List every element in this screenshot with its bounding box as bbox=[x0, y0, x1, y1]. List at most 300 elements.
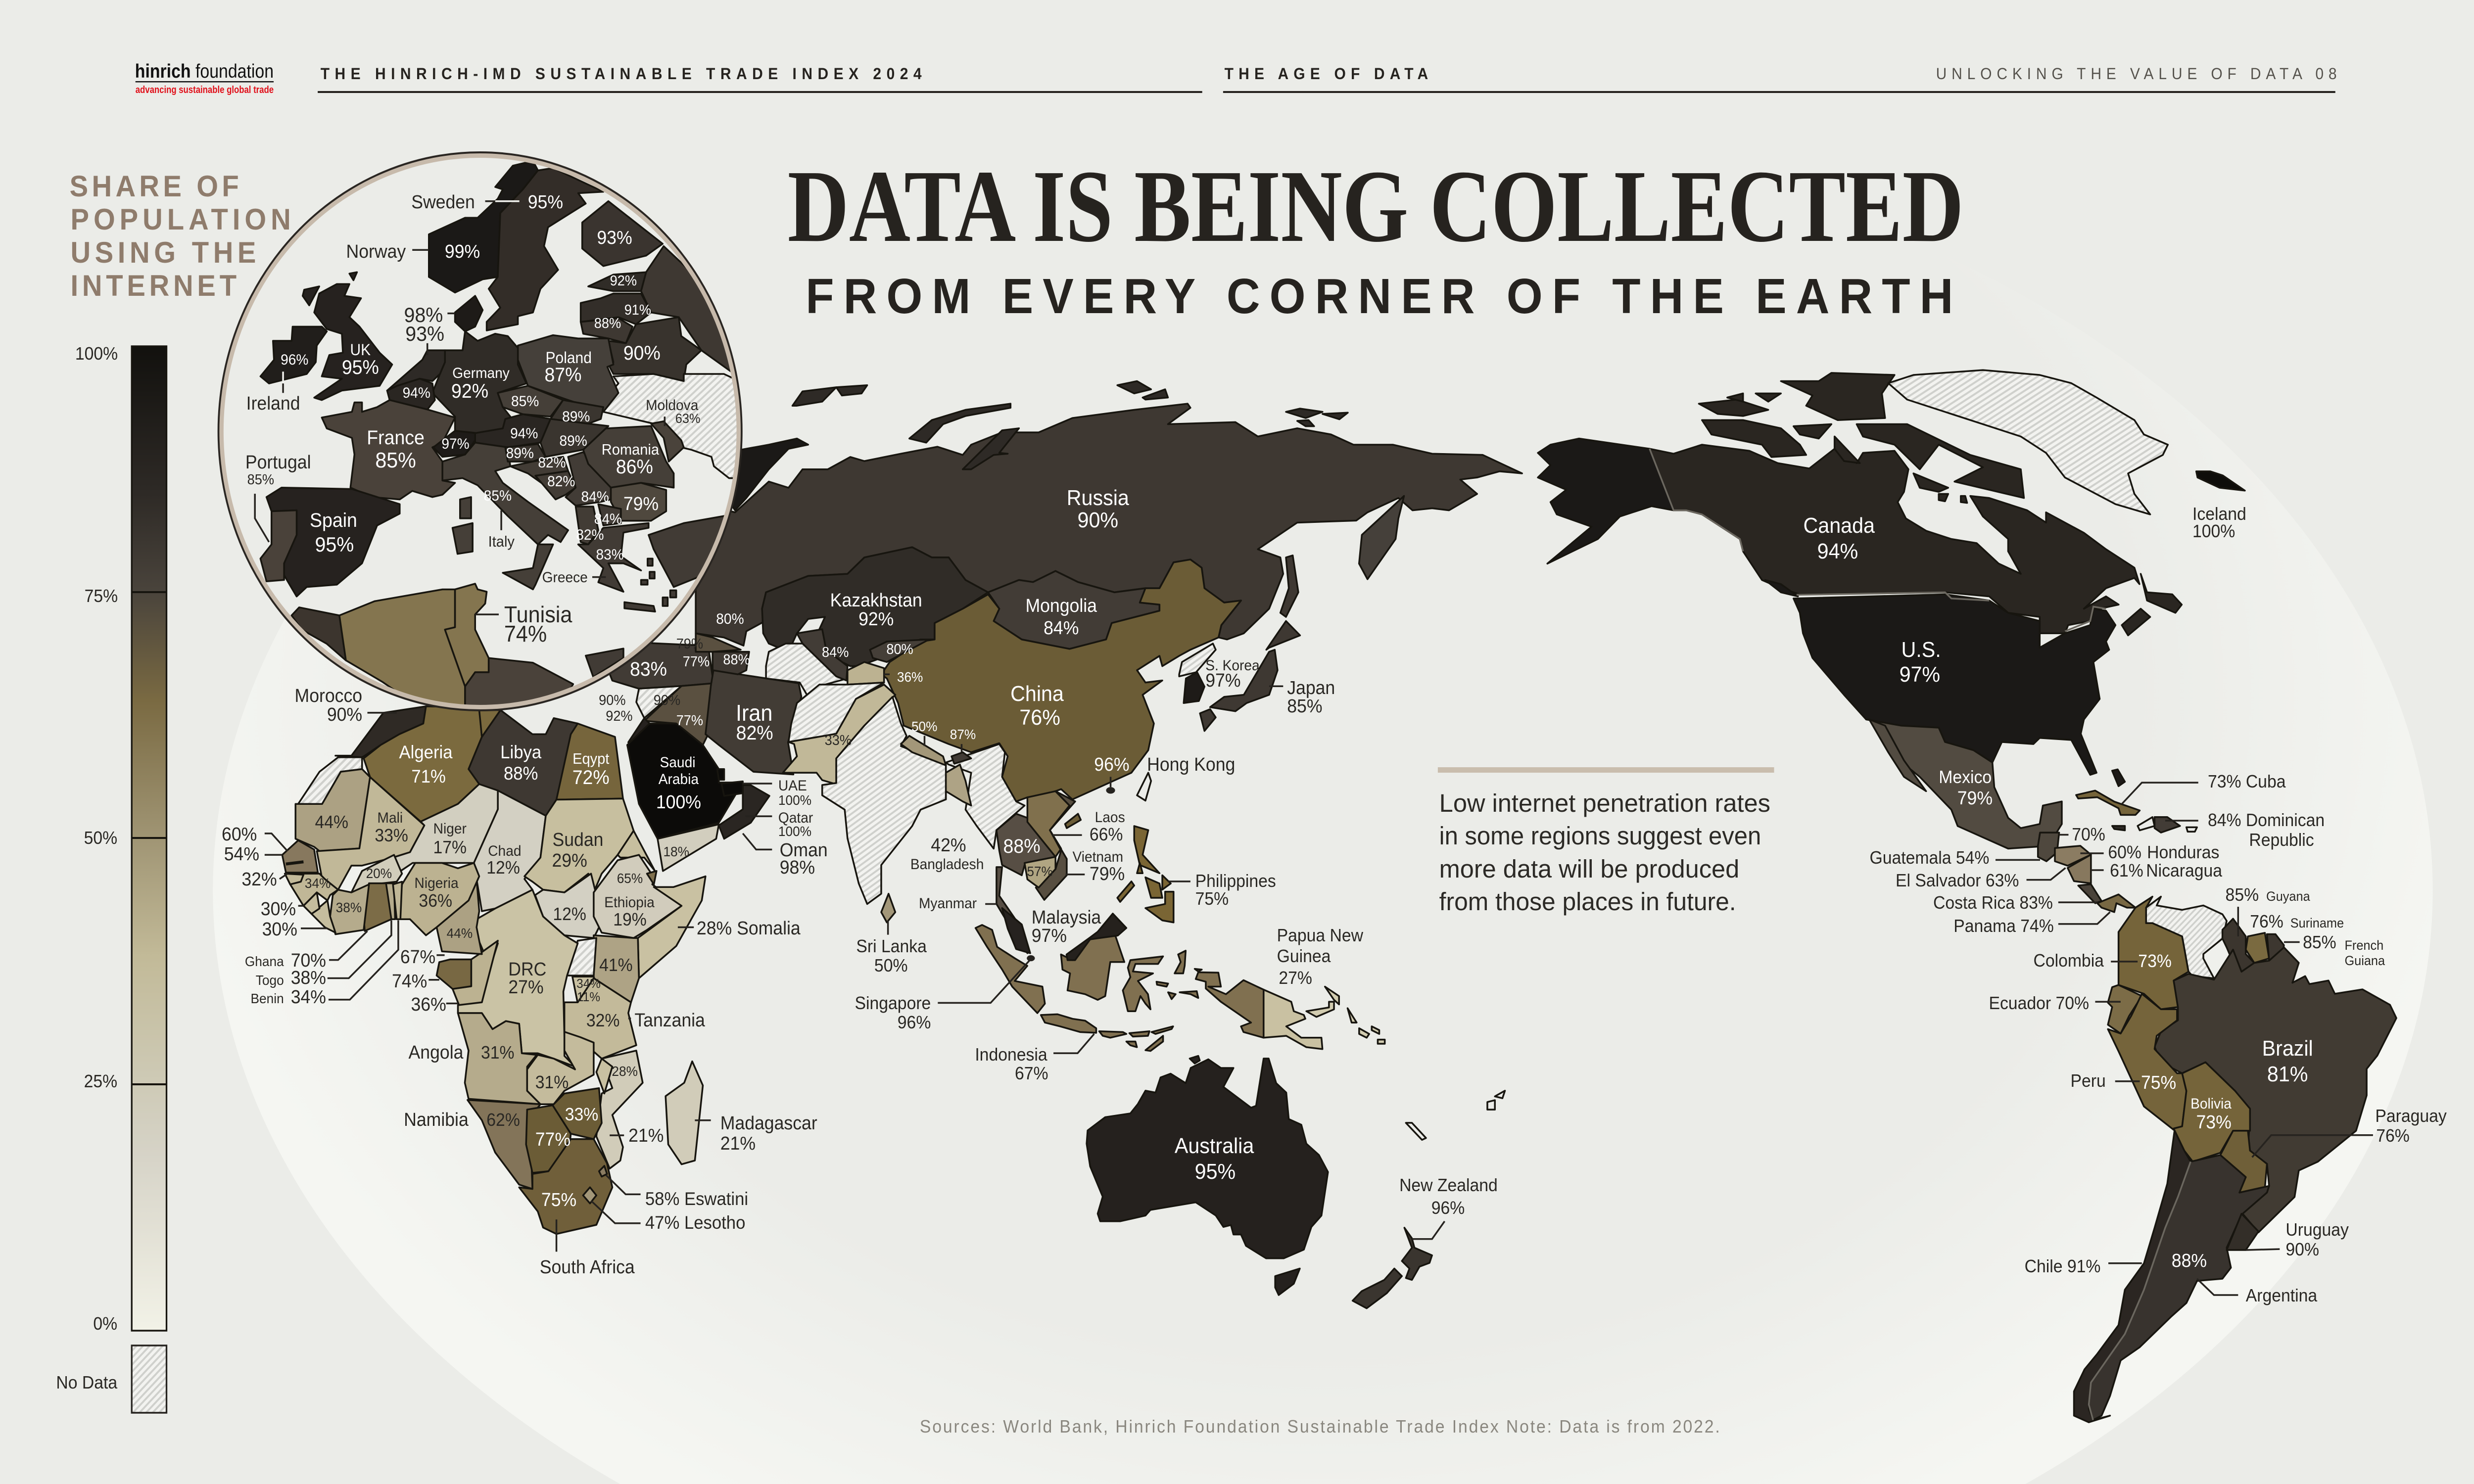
Africa and Middle East labels: Madagascar bbox=[720, 1113, 817, 1133]
Africa and Middle East labels: 31% bbox=[535, 1072, 569, 1092]
legend heading bbox=[70, 170, 291, 302]
Sakhalin bbox=[1281, 556, 1298, 617]
Europe labels: Sweden bbox=[411, 191, 475, 212]
Africa and Middle East labels: South Africa bbox=[540, 1256, 635, 1277]
Africa and Middle East labels: 71% bbox=[411, 766, 446, 787]
Asia and Oceania labels: 96% bbox=[898, 1013, 931, 1032]
Africa and Middle East labels: 77% bbox=[683, 653, 710, 669]
Europe labels: 89% bbox=[506, 445, 534, 462]
Europe labels: 96% bbox=[281, 352, 308, 368]
no data swatch: No Data bbox=[56, 1373, 118, 1392]
title: DATA IS BEING COLLECTED bbox=[788, 148, 1964, 263]
Morocco bbox=[335, 706, 426, 757]
Africa and Middle East labels: 72% bbox=[572, 767, 610, 788]
Africa and Middle East labels: Sudan bbox=[552, 829, 603, 850]
Haiti bbox=[2138, 817, 2154, 831]
Asia and Oceania labels: Vietnam bbox=[1072, 849, 1123, 865]
colour bar ticks: 50% bbox=[84, 828, 117, 848]
Europe labels: 85% bbox=[511, 393, 539, 410]
Asia and Oceania labels: Indonesia bbox=[975, 1045, 1047, 1065]
Asia and Oceania labels: Malaysia bbox=[1032, 907, 1101, 928]
Brazil bbox=[2154, 947, 2396, 1232]
Denmark bbox=[455, 296, 482, 331]
Africa and Middle East labels: 77% bbox=[535, 1129, 571, 1150]
Europe labels: 91% bbox=[624, 302, 651, 318]
Africa and Middle East labels: Saudi bbox=[660, 754, 695, 771]
Japan bbox=[1200, 621, 1300, 731]
Zambia bbox=[527, 1032, 594, 1104]
Belgium bbox=[387, 379, 435, 410]
Americas labels: Honduras bbox=[2147, 842, 2219, 862]
Africa and Middle East labels: 47% Lesotho bbox=[645, 1212, 745, 1233]
Africa and Middle East labels: 11% bbox=[577, 990, 600, 1004]
Chile-Argentina border bbox=[2089, 1161, 2190, 1420]
Asia and Oceania labels bbox=[822, 486, 1498, 1218]
no data swatch bbox=[56, 1345, 167, 1413]
Newfoundland bbox=[2141, 574, 2182, 613]
Cambodia bbox=[1025, 857, 1055, 887]
Vietnam bbox=[1036, 791, 1075, 900]
Asia and Oceania labels: Singapore bbox=[855, 993, 931, 1013]
Europe labels: 84% bbox=[581, 489, 609, 505]
Thailand bbox=[997, 814, 1055, 875]
Pakistan bbox=[783, 685, 895, 784]
logo: Hinrich Foundation: advancing sustainable global trade bbox=[136, 84, 274, 95]
Africa and Middle East labels: Iran bbox=[736, 701, 772, 726]
legend heading: SHARE OF bbox=[70, 170, 239, 203]
Asia and Oceania labels: 50% bbox=[911, 718, 937, 734]
header: section title: THE AGE OF DATA bbox=[1225, 65, 1428, 83]
Europe labels: 85% bbox=[375, 448, 416, 472]
Asia and Oceania labels: Myanmar bbox=[919, 895, 977, 912]
Bulgaria bbox=[611, 483, 666, 521]
Greece bbox=[578, 523, 649, 592]
Americas labels bbox=[1804, 504, 2447, 1305]
Europe labels: 84% bbox=[594, 511, 622, 527]
Africa and Middle East labels: 82% bbox=[736, 722, 773, 744]
Africa and Middle East labels: Chad bbox=[488, 843, 521, 859]
logo: Hinrich Foundation: hinrich foundation bbox=[135, 61, 274, 82]
Americas labels: Nicaragua bbox=[2146, 861, 2223, 881]
leader lines: Africa bbox=[265, 713, 772, 1252]
Sweden bbox=[487, 168, 603, 330]
Finland bbox=[582, 201, 663, 266]
legend heading: USING THE bbox=[70, 236, 256, 269]
Argentina bbox=[2089, 1155, 2269, 1420]
Angola bbox=[458, 1013, 540, 1104]
Pacific islands bbox=[1306, 987, 1385, 1044]
Africa and Middle East labels: 29% bbox=[552, 850, 587, 871]
Canadian Arctic islands bbox=[1699, 373, 2024, 503]
leader lines: Oceania bbox=[938, 960, 1445, 1239]
New Caledonia and Fiji outlines bbox=[1406, 1091, 1505, 1140]
Guyana bbox=[2223, 919, 2254, 972]
Tasmania bbox=[1275, 1268, 1300, 1295]
Africa and Middle East labels: 17% bbox=[433, 837, 467, 857]
Europe labels bbox=[245, 191, 700, 647]
Asia and Oceania labels: Bangladesh bbox=[910, 856, 984, 873]
Americas labels: Bolivia bbox=[2190, 1096, 2232, 1112]
Africa and Middle East labels: 100% bbox=[778, 823, 811, 839]
Africa and Middle East labels: 90% bbox=[599, 692, 626, 708]
Jordan bbox=[628, 718, 650, 742]
world map: Central and South America bbox=[1996, 769, 2396, 1422]
Austria bbox=[475, 414, 551, 447]
Asia and Oceania labels: Laos bbox=[1095, 809, 1125, 826]
Asia and Oceania labels: 67% bbox=[1015, 1064, 1048, 1083]
Americas labels: Ecuador 70% bbox=[1989, 993, 2089, 1013]
Melville Island bbox=[1189, 1056, 1200, 1064]
Switzerland bbox=[433, 431, 475, 457]
legend: share of population bbox=[56, 170, 291, 1413]
Asia and Oceania labels: 84% bbox=[1044, 617, 1079, 638]
Nova Scotia bbox=[2122, 609, 2150, 635]
Americas labels: 76% bbox=[2376, 1126, 2410, 1146]
Africa and Middle East labels: 33% bbox=[375, 826, 408, 845]
Spain bbox=[267, 488, 400, 597]
Americas labels: Chile 91% bbox=[2025, 1256, 2100, 1276]
Africa and Middle East labels: 34% bbox=[291, 986, 326, 1007]
Africa and Middle East labels: 33% bbox=[825, 732, 852, 748]
Portugal bbox=[260, 510, 297, 581]
Africa and Middle East labels: 19% bbox=[613, 910, 647, 929]
Africa and Middle East labels: 80% bbox=[716, 611, 744, 627]
Americas labels: 81% bbox=[2267, 1062, 2308, 1086]
world map: Southeast Asia and Oceania bbox=[938, 914, 1505, 1308]
colour bar ticks: 0% bbox=[93, 1314, 117, 1334]
Yemen bbox=[658, 824, 719, 871]
Laos bbox=[1027, 791, 1070, 857]
Africa and Middle East labels: 34% bbox=[576, 976, 601, 991]
Lithuania bbox=[581, 318, 632, 343]
Africa and Middle East labels: 30% bbox=[261, 898, 296, 919]
South Sudan bbox=[535, 874, 602, 938]
Africa and Middle East labels: 28% bbox=[612, 1063, 638, 1079]
leader lines: Europe bbox=[255, 201, 665, 614]
header: report title: THE HINRICH-IMD SUSTAINABLE TRADE INDEX 2024 bbox=[321, 65, 922, 83]
Europe labels: Portugal bbox=[245, 452, 311, 472]
Paraguay bbox=[2220, 1131, 2267, 1193]
Africa and Middle East labels: 58% Eswatini bbox=[645, 1189, 748, 1209]
Europe labels: 89% bbox=[559, 433, 587, 449]
Americas labels: 79% bbox=[1957, 788, 1993, 808]
Americas labels: 85% bbox=[2226, 885, 2259, 905]
Sierra Leone bbox=[303, 892, 320, 914]
Americas labels: Brazil bbox=[2262, 1036, 2313, 1061]
Africa and Middle East labels: 36% bbox=[419, 891, 452, 911]
Africa and Middle East labels: 88% bbox=[723, 651, 750, 667]
Honduras bbox=[2055, 846, 2091, 866]
Africa and Middle East labels: 54% bbox=[224, 843, 259, 864]
Eritrea bbox=[618, 831, 655, 871]
Ethiopia bbox=[594, 855, 681, 938]
Afghanistan bbox=[789, 683, 884, 742]
Congo bbox=[453, 941, 498, 1005]
Africa and Middle East labels: Niger bbox=[433, 821, 467, 837]
North Macedonia bbox=[598, 504, 621, 525]
callout: low internet penetration: from those places in future. bbox=[1439, 888, 1736, 916]
Americas labels: Republic bbox=[2249, 830, 2314, 850]
Nicaragua bbox=[2068, 855, 2091, 883]
Africa and Middle East labels: 18% bbox=[663, 843, 689, 859]
Africa and Middle East labels: Qatar bbox=[778, 810, 813, 826]
Costa Rica bbox=[2078, 884, 2101, 903]
Romania bbox=[583, 426, 674, 488]
Mali bbox=[317, 777, 425, 890]
Europe labels: 89% bbox=[562, 409, 590, 425]
Somalia bbox=[638, 877, 706, 978]
Serbia bbox=[566, 452, 611, 506]
Azerbaijan bbox=[713, 652, 749, 674]
Saudi Arabia bbox=[627, 724, 743, 839]
Asia and Oceania labels: Japan bbox=[1287, 677, 1335, 698]
Croatia bbox=[510, 457, 568, 488]
Russia west bbox=[640, 245, 730, 372]
Africa and Middle East labels: 60% bbox=[222, 824, 257, 844]
Madagascar bbox=[666, 1062, 703, 1164]
Caucasus: Georgia and Armenia bbox=[696, 633, 741, 652]
Americas labels: Guyana bbox=[2266, 888, 2310, 904]
Hainan bbox=[1065, 814, 1081, 828]
Nepal bbox=[901, 736, 946, 765]
Asia and Oceania labels: 80% bbox=[886, 641, 913, 657]
callout: low internet penetration: more data will be produced bbox=[1439, 855, 1739, 883]
Americas labels: 73% Cuba bbox=[2208, 772, 2286, 791]
callout: low internet penetration: Low internet penetration rates bbox=[1439, 789, 1770, 817]
Asia and Oceania labels: 42% bbox=[931, 835, 966, 855]
Togo bbox=[386, 883, 395, 919]
Europe labels: Romania bbox=[602, 441, 659, 458]
Asia and Oceania labels: 97% bbox=[1032, 925, 1067, 946]
Philippines bbox=[1117, 826, 1174, 923]
Africa and Middle East labels: 21% bbox=[720, 1133, 756, 1154]
Asia and Oceania labels: 87% bbox=[950, 726, 976, 742]
Gabon bbox=[436, 960, 471, 989]
Africa and Middle East labels: 65% bbox=[617, 870, 643, 886]
Asia and Oceania labels: China bbox=[1010, 682, 1064, 706]
Americas labels: Canada bbox=[1804, 513, 1875, 538]
Guinea bbox=[285, 874, 338, 906]
Africa and Middle East labels: 41% bbox=[599, 955, 633, 975]
Asia and Oceania labels: 79% bbox=[1090, 863, 1125, 884]
Malawi bbox=[596, 1059, 613, 1094]
Vancouver Island bbox=[1765, 580, 1798, 597]
Africa and Middle East labels: 90% bbox=[327, 704, 362, 725]
Mozambique bbox=[596, 1051, 643, 1168]
world map: North America bbox=[1538, 370, 2245, 849]
Bahamas bbox=[2112, 769, 2125, 786]
Bolivia bbox=[2174, 1062, 2250, 1161]
Europe labels: 92% bbox=[451, 380, 488, 402]
Asia and Oceania labels: Australia bbox=[1175, 1134, 1254, 1158]
logo: Hinrich Foundation bbox=[135, 61, 274, 95]
world map: Asia bbox=[696, 381, 1522, 953]
Europe labels: Norway bbox=[346, 241, 406, 262]
Asia and Oceania labels: 76% bbox=[1019, 705, 1060, 730]
Sri Lanka bbox=[881, 894, 895, 923]
Africa and Middle East labels: 33% bbox=[565, 1105, 598, 1124]
Djibouti bbox=[647, 871, 657, 884]
Slovenia bbox=[505, 444, 545, 462]
Africa and Middle East labels: 90% bbox=[654, 692, 680, 708]
Guatemala and Belize bbox=[2038, 833, 2059, 861]
Americas labels: 70% bbox=[2072, 825, 2105, 844]
legend heading: POPULATION bbox=[70, 203, 291, 236]
Africa and Middle East labels: 67% bbox=[400, 946, 435, 967]
Dominican Republic bbox=[2154, 817, 2180, 833]
Zimbabwe bbox=[553, 1088, 602, 1139]
Turkmenistan bbox=[766, 644, 848, 697]
Asia and Oceania labels: 50% bbox=[874, 956, 907, 975]
colour bar ticks: 100% bbox=[75, 344, 118, 364]
colour bar ticks bbox=[75, 344, 118, 1334]
Americas labels: Peru bbox=[2070, 1071, 2106, 1091]
United Kingdom bbox=[314, 284, 392, 400]
Europe labels: 95% bbox=[315, 533, 354, 556]
Africa and Middle East labels: UAE bbox=[778, 778, 807, 794]
Ecuador bbox=[2108, 985, 2142, 1033]
Suriname bbox=[2246, 933, 2269, 963]
Rwanda Burundi bbox=[572, 976, 602, 1003]
Africa and Middle East labels: 12% bbox=[486, 858, 520, 878]
China bbox=[881, 559, 1241, 801]
Europe labels: Moldova bbox=[646, 397, 699, 414]
Asia and Oceania labels: S. Korea bbox=[1205, 657, 1260, 674]
Morocco north bbox=[291, 607, 346, 660]
Russia bbox=[696, 404, 1522, 646]
Europe labels: 88% bbox=[594, 315, 621, 331]
Asia and Oceania labels: Philippines bbox=[1195, 871, 1276, 891]
Africa and Middle East labels: 75% bbox=[541, 1189, 576, 1210]
Ukraine bbox=[603, 374, 754, 478]
Albania bbox=[575, 507, 598, 545]
Asia and Oceania labels: 90% bbox=[1078, 508, 1118, 532]
Africa and Middle East labels: 70% bbox=[291, 950, 326, 971]
Ghana bbox=[364, 883, 391, 931]
Algeria north bbox=[339, 589, 465, 720]
Nigeria bbox=[399, 863, 479, 935]
Europe labels: 92% bbox=[610, 273, 637, 288]
Americas labels: 61% bbox=[2110, 861, 2143, 881]
Kola dark coast bbox=[729, 439, 808, 510]
Europe labels: 95% bbox=[528, 191, 563, 212]
Papua New Guinea bbox=[1264, 990, 1323, 1049]
Tunisia south bbox=[479, 710, 501, 737]
Europe labels: 74% bbox=[504, 622, 547, 647]
Americas labels: Costa Rica 83% bbox=[1933, 893, 2053, 913]
Europe labels: 82% bbox=[538, 455, 566, 471]
Iceland bbox=[2196, 471, 2245, 491]
Malaysian Borneo bbox=[1066, 914, 1126, 960]
Americas labels: U.S. bbox=[1902, 638, 1941, 662]
Asia and Oceania labels: Sri Lanka bbox=[856, 936, 927, 956]
legend heading: INTERNET bbox=[70, 269, 237, 302]
Uganda bbox=[567, 938, 596, 975]
Europe labels: 87% bbox=[544, 364, 581, 386]
New Zealand bbox=[1353, 1228, 1432, 1308]
Europe labels: 63% bbox=[675, 411, 700, 426]
Asia and Oceania labels: 96% bbox=[1431, 1198, 1465, 1218]
Americas labels: 94% bbox=[1817, 539, 1858, 563]
source note: Sources: World Bank, Hinrich Foundation Sustainable Trade Index Note: Data is from 2022. bbox=[920, 1417, 1720, 1437]
Egypt bbox=[557, 724, 623, 800]
Peru bbox=[2108, 994, 2187, 1130]
Asia and Oceania labels: Russia bbox=[1067, 486, 1129, 510]
Europe labels: Poland bbox=[546, 349, 592, 367]
Africa and Middle East labels: 79% bbox=[676, 636, 703, 651]
Africa and Middle East labels: Tanzania bbox=[634, 1010, 705, 1030]
Bosnia bbox=[535, 471, 575, 500]
France bbox=[322, 400, 455, 500]
Americas labels: 60% bbox=[2108, 842, 2141, 862]
Americas labels: French bbox=[2344, 937, 2383, 953]
Europe labels: 99% bbox=[445, 241, 480, 262]
Uzbekistan bbox=[797, 629, 848, 681]
Europe labels: 79% bbox=[623, 493, 659, 514]
Asia and Oceania labels: 95% bbox=[1195, 1159, 1236, 1184]
callout: low internet penetration bbox=[1438, 767, 1774, 916]
Africa and Middle East labels: 44% bbox=[315, 812, 348, 832]
Turkey bbox=[586, 643, 714, 689]
Asia and Oceania labels: 36% bbox=[897, 669, 923, 685]
Cuba bbox=[2076, 790, 2140, 815]
Americas labels: 73% bbox=[2138, 951, 2172, 971]
Europe labels: 82% bbox=[576, 527, 604, 543]
Eswatini bbox=[599, 1166, 607, 1177]
colour bar ticks: 25% bbox=[84, 1071, 117, 1091]
Iran bbox=[706, 670, 802, 775]
Ireland bbox=[260, 326, 327, 383]
Americas labels: 73% bbox=[2196, 1112, 2232, 1132]
Americas labels: Iceland bbox=[2192, 504, 2246, 524]
Africa and Middle East labels: 38% bbox=[336, 899, 362, 915]
leader lines: Latin America bbox=[1996, 783, 2373, 1295]
Africa and Middle East labels: Libya bbox=[500, 742, 541, 762]
Asia and Oceania labels: 85% bbox=[1287, 696, 1323, 716]
Asia and Oceania labels: New Zealand bbox=[1399, 1175, 1498, 1195]
Ivory Coast bbox=[330, 884, 369, 934]
Europe labels: 85% bbox=[484, 488, 512, 504]
Asia and Oceania labels: 27% bbox=[1279, 968, 1312, 988]
Africa and Middle East labels: 88% bbox=[504, 763, 538, 784]
Asia and Oceania labels: Guinea bbox=[1277, 946, 1331, 966]
Jamaica bbox=[2112, 826, 2125, 831]
Americas labels: Suriname bbox=[2290, 915, 2344, 930]
Europe labels: 95% bbox=[342, 357, 379, 378]
India bbox=[822, 697, 946, 904]
panel: Europe inset circle bbox=[219, 152, 754, 720]
Kyrgyzstan bbox=[870, 640, 929, 662]
Africa and Middle East labels: Namibia bbox=[404, 1109, 469, 1130]
Americas labels: Panama 74% bbox=[1953, 916, 2054, 936]
Africa and Middle East labels: 34% bbox=[305, 875, 331, 891]
Norway bbox=[429, 161, 538, 292]
Greenland bbox=[1888, 370, 2168, 514]
Asia and Oceania labels: 96% bbox=[1094, 754, 1130, 775]
Africa and Middle East labels: Morocco bbox=[295, 685, 362, 706]
Tajikistan bbox=[848, 662, 884, 685]
Qatar bbox=[717, 769, 724, 780]
Botswana bbox=[526, 1105, 571, 1173]
Europe labels: 97% bbox=[441, 436, 470, 452]
Poland bbox=[518, 335, 618, 412]
Africa and Middle East labels: 31% bbox=[481, 1043, 515, 1063]
Africa and Middle East labels: Ghana bbox=[245, 953, 285, 969]
Iraq bbox=[644, 683, 714, 745]
Asia and Oceania labels: Mongolia bbox=[1025, 595, 1097, 616]
Europe labels: 83% bbox=[596, 547, 624, 563]
Africa and Middle East labels: 21% bbox=[628, 1125, 664, 1146]
